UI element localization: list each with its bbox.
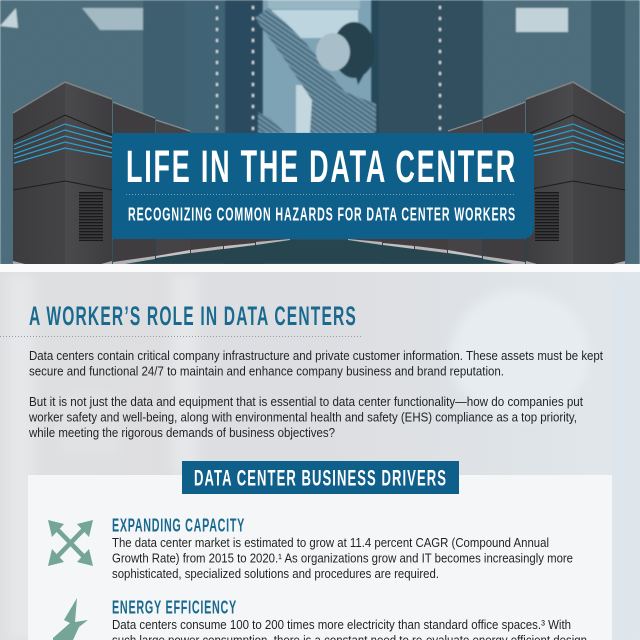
server rack row: right	[348, 102, 525, 266]
business drivers heading: DATA CENTER BUSINESS DRIVERS	[194, 466, 447, 490]
icon: left server tower	[13, 82, 112, 276]
white band under hero	[0, 264, 640, 272]
driver heading: EXPANDING CAPACITY	[112, 516, 245, 536]
driver body: Data centers consume 100 to 200 times more electricity than standard office spaces.³ With	[112, 618, 571, 632]
icon: right server tower	[526, 82, 625, 276]
icon: expanding arrows	[48, 520, 93, 566]
faded page background photo	[0, 264, 640, 640]
driver body: Growth Rate) from 2015 to 2020.¹ As organizations grow and IT becomes increasingly more	[112, 552, 573, 566]
driver heading: ENERGY EFFICIENCY	[112, 598, 237, 618]
intro paragraph 2: worker safety and well-being, along with environmental health and safety (EHS) compliance as a top priority,	[28, 410, 577, 424]
driver body: sophisticated, specialized solutions and procedures are required.	[112, 567, 439, 581]
title banner	[112, 133, 534, 239]
intro paragraph 2: But it is not just the data and equipment that is essential to data center functionality—how do companies put	[29, 395, 583, 409]
intro paragraph 2: while meeting the rigorous demands of business objectives?	[28, 426, 335, 440]
driver: expanding capacity	[112, 516, 573, 581]
business drivers heading	[182, 461, 459, 494]
driver: energy efficiency	[112, 598, 587, 640]
hero photo background	[0, 0, 640, 265]
driver body: The data center market is estimated to grow at 11.4 percent CAGR (Compound Annual	[112, 536, 549, 550]
dotted heading divider	[0, 336, 361, 338]
server rack row: left	[113, 102, 290, 266]
section heading: A WORKER’S ROLE IN DATA CENTERS	[29, 301, 357, 331]
intro paragraph 1: secure and functional 24/7 to maintain and enhance company business and brand reputation.	[29, 364, 504, 378]
icon: lightning bolt	[53, 598, 88, 640]
panel: business drivers card	[28, 475, 612, 640]
